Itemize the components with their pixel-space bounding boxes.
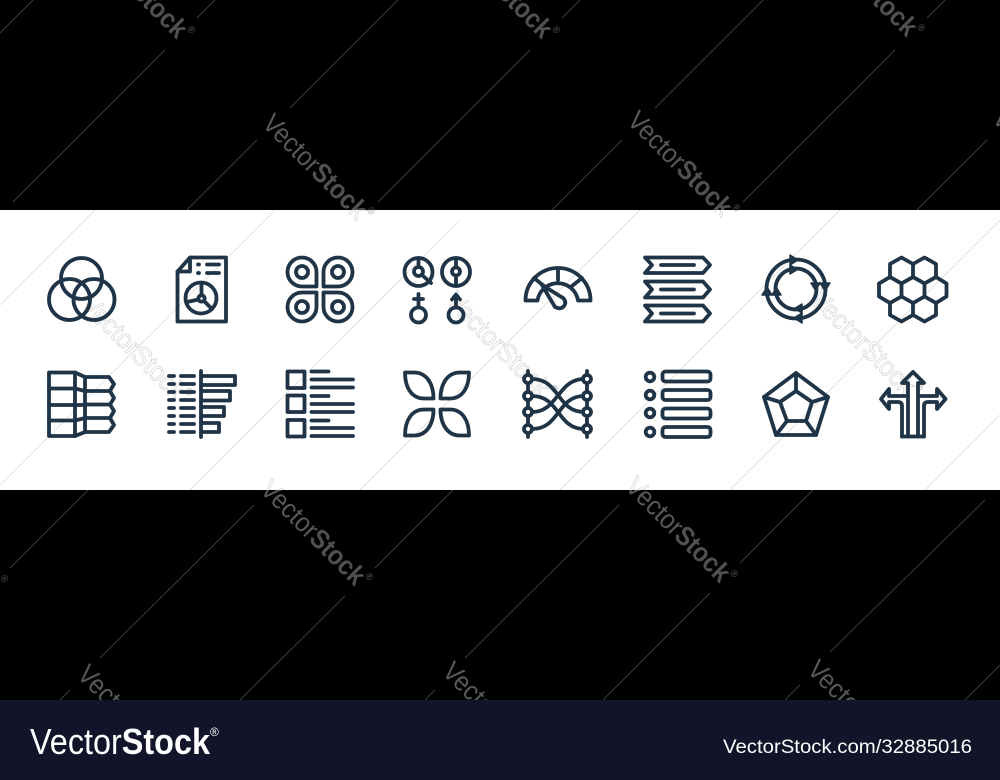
icon: overlapping circles [49,258,114,320]
watermarks on black: VectorStock [255,474,377,596]
watermarks on black: ® [362,571,375,584]
icon: folded table with arrow tabs [49,372,114,436]
watermarks on black: VectorStock [620,471,742,593]
watermarks on black: VectorStock [72,659,194,780]
icon: stacked arrow banners [645,258,710,322]
watermarks on white: VectorStock [257,108,376,228]
watermarks on black: VectorStock [257,108,379,230]
icon: four teardrop pins [288,258,352,322]
watermarks on white: ® [727,568,740,581]
watermarks on black: ® [727,568,740,581]
white icon band [0,210,1000,490]
icon: sankey flow diagram [524,371,591,437]
icon: report document with pie chart [178,258,226,322]
watermarks on white: VectorStock [440,286,559,406]
watermarks on white: ® [912,381,925,394]
watermarks on white: VectorStock [620,471,739,591]
footer logo: VectorStock [30,721,211,762]
watermarks on black: ® [544,753,557,766]
icon: honeycomb [879,258,946,322]
watermarks on black: VectorStock [802,654,924,776]
watermarks on white: VectorStock [805,284,924,404]
icon: four leaves [405,372,469,436]
watermarks on white: ® [729,202,742,215]
watermarks on white: VectorStock [255,474,374,594]
watermarks on black: VectorStock [622,105,744,227]
icon: checklist with text lines [288,372,353,436]
icon: horizontal bar chart with list [169,371,235,437]
watermarks on black: ® [549,24,562,37]
watermarks on black: ® [179,756,192,769]
watermarks on white: ® [362,571,375,584]
watermarks on white: ® [182,386,195,399]
icon: speedometer gauge [526,268,590,308]
watermarks on black: ® [909,751,922,764]
watermarks on white [84,210,923,490]
icon: circular arrows [762,255,830,323]
registered mark: ® [210,725,219,739]
icon: pentagon radar [764,373,828,435]
icon: three-way direction arrows [881,372,946,436]
watermarks on white: VectorStock [75,289,194,409]
watermarks on black: ® [914,22,927,35]
watermarks on white: VectorStock [622,105,741,225]
watermarks on black: ® [364,205,377,218]
icon: bullet list with bars [646,372,710,437]
footer image id: VectorStock.com/32885016 [723,737,972,758]
icon: two dials with connectors [404,258,470,322]
watermarks on black: ® [184,24,197,37]
footer bar [0,700,1000,780]
watermarks on white: ® [547,383,560,396]
watermarks on black: ® [729,202,742,215]
watermarks on white: ® [364,205,377,218]
watermarks on black: VectorStock [437,656,559,778]
